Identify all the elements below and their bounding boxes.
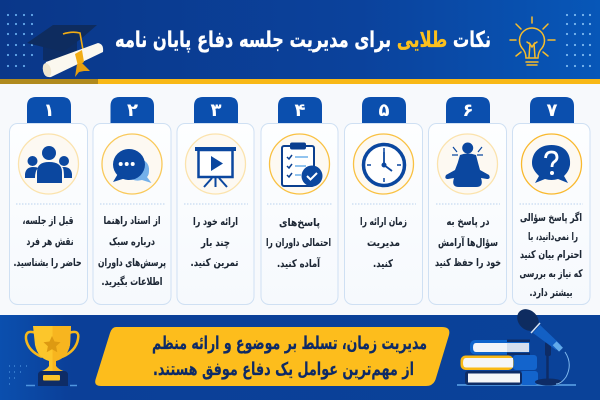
text: tip 2: درباره سبک [109,236,155,248]
text: tip 5 [360,216,407,270]
number tab 5 [362,97,406,123]
number tab 5: ۵ [378,100,390,121]
icon: stack of books [457,340,576,385]
number tab 1 [27,97,71,123]
header band [0,0,600,84]
text: tip 1 [14,215,82,269]
callout: summary: مدیریت زمان، تسلط بر موضوع و ارائه منظم [152,333,427,354]
text: tip 4 [266,217,331,270]
text: tip 6 [435,216,501,269]
text: tip 4: احتمالی داوران را [266,237,331,249]
number tab 4 [278,97,322,123]
text: tip 4: پاسخ‌های [279,217,320,229]
panel: card 4 [261,97,338,304]
icon: presentation board [195,147,236,187]
text: tip 1: نقش هر فرد [26,236,74,248]
title: نکات طلایی برای مدیریت جلسه دفاع پایان نامه [115,28,491,53]
panel: card 1 [10,97,88,304]
icon: question speech bubble [532,145,570,183]
text: tip 2 [98,215,166,288]
number tab 6 [446,97,490,123]
text: tip 7: را نمی‌دانید، با [528,231,578,243]
text: tip 3: ارائه خود را [193,216,238,228]
panel: card 7 [512,97,590,304]
text: tip 5: مدیریت [367,237,400,249]
text: tip 7: احترام بیان کنید [520,249,582,261]
text: tip 5: کنید. [373,258,394,270]
panel: card 6 [428,97,506,304]
number tab 2: ۲ [127,100,138,121]
icon: chat bubbles [113,149,152,183]
text: tip 2: پرسش‌های داوران [98,257,166,269]
panel: card 5 [344,97,422,304]
number tab 4: ۴ [294,100,306,121]
text: tip 6: خود را حفظ کنید [435,257,501,269]
text: tip 7 [520,211,583,299]
text: tip 7: بیشتر دارد. [530,287,573,299]
icon: meditation figure [445,142,490,187]
footer band [0,315,600,400]
number tab 6: ۶ [462,100,474,121]
text: tip 5: زمان ارائه را [360,216,407,228]
text: tip 1: حاضر را بشناسید. [14,257,82,269]
number tab 3: ۳ [210,100,222,121]
icon: light bulb [510,17,555,65]
icon: graduation cap and diploma [27,25,103,78]
text: tip 6: در پاسخ به [446,216,490,228]
icon: clipboard with check [282,142,322,186]
text: tip 4: آماده کنید. [277,257,320,270]
icon: clock [364,144,404,186]
icon: trophy [26,326,78,386]
number tab 2 [110,97,154,123]
text: tip 6: سؤال‌ها آرامش [438,236,498,249]
text: tip 2: اطلاعات بگیرید. [102,275,162,288]
text: tip 2: از استاد راهنما [104,215,160,227]
number tab 7 [530,97,574,123]
text: tip 1: قبل از جلسه، [22,215,74,227]
icon: microphone [513,305,569,386]
text: tip 3: تمرین کنید. [190,257,239,269]
callout: summary: از مهم‌ترین عوامل یک دفاع موفق هستند. [153,359,414,380]
icon: people group [25,146,72,183]
callout: summary [95,327,449,386]
text: tip 3 [190,216,239,269]
number tab 3 [194,97,238,123]
panel: card 3 [177,97,254,304]
text: tip 3: چند بار [200,237,230,249]
number tab 7: ۷ [546,100,558,121]
number tab 1: ۱ [44,100,54,121]
panel: card 2 [93,97,171,304]
